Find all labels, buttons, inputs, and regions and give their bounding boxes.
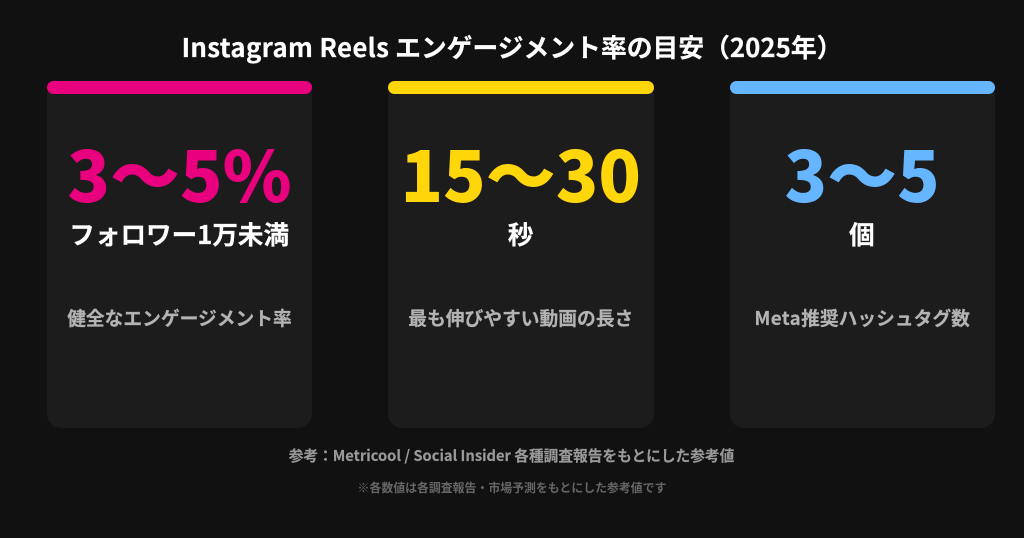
- description: length: 最も伸びやすい動画の長さ: [408, 304, 633, 331]
- panel: engagement rate: [47, 81, 312, 428]
- source note: 参考：Metricool / Social Insider 各種調査報告をもとにした参考値: [289, 445, 734, 466]
- accent bar: pink: [47, 81, 312, 94]
- panel: video length: [388, 81, 654, 428]
- accent bar: yellow: [388, 81, 654, 94]
- panel: hashtags: [730, 81, 995, 428]
- description: engagement: 健全なエンゲージメント率: [67, 304, 292, 331]
- title: Instagram Reels エンゲージメント率の目安（2025年）: [182, 28, 842, 65]
- big number: 3〜5%: 3〜5%: [67, 122, 292, 222]
- accent bar: blue: [730, 81, 995, 94]
- big number: 3〜5: 3〜5: [784, 122, 940, 222]
- description: hashtags: Meta推奨ハッシュタグ数: [754, 304, 970, 331]
- sub label: count: 個: [849, 215, 875, 252]
- disclaimer: ※各数値は各調査報告・市場予測をもとにした参考値です: [358, 479, 666, 496]
- big number: 15〜30: 15〜30: [401, 122, 641, 222]
- sub label: followers: フォロワー1万未満: [69, 215, 289, 252]
- sub label: seconds: 秒: [508, 215, 533, 252]
